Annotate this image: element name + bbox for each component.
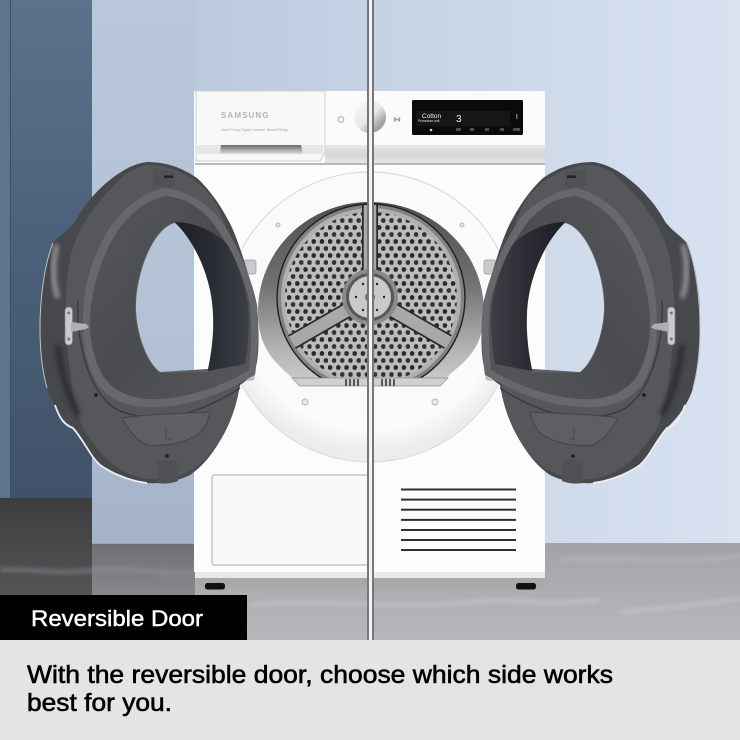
left door	[40, 162, 258, 484]
vent slots	[401, 488, 516, 551]
display	[412, 100, 523, 135]
control panel	[195, 91, 545, 165]
drum hub	[342, 269, 398, 325]
body text: With the reversible door, choose which side works	[27, 661, 613, 689]
dryer base and feet	[195, 572, 545, 590]
display: Prosedure kuft	[418, 119, 440, 123]
drum	[258, 202, 484, 378]
body text: best for you.	[27, 689, 172, 717]
title tag: Reversible Door	[31, 606, 203, 631]
feature line: Heat Pump Digital Inverter SmartThings	[221, 128, 288, 132]
drum spokes	[292, 205, 448, 342]
background wall	[92, 0, 740, 545]
perforated drum back	[285, 212, 457, 384]
door opening	[225, 172, 515, 462]
knob	[354, 101, 386, 133]
lint filter lip	[292, 378, 448, 386]
screws	[276, 223, 464, 405]
display: 3	[456, 114, 462, 125]
lower service panel	[212, 475, 368, 565]
center divider line	[367, 0, 374, 640]
wall left section	[92, 0, 195, 545]
pause icon: ⧓	[393, 115, 401, 124]
marble floor	[0, 498, 740, 640]
title tag	[0, 595, 247, 640]
display: Cotton	[422, 113, 442, 120]
caption panel	[0, 640, 740, 740]
body text	[27, 661, 613, 717]
power icon	[338, 117, 344, 122]
detergent drawer	[195, 91, 325, 161]
dark pillar	[0, 0, 92, 498]
right door	[482, 162, 700, 484]
brand name: SAMSUNG	[221, 111, 270, 120]
dryer body	[194, 91, 545, 590]
hinges	[242, 260, 498, 380]
